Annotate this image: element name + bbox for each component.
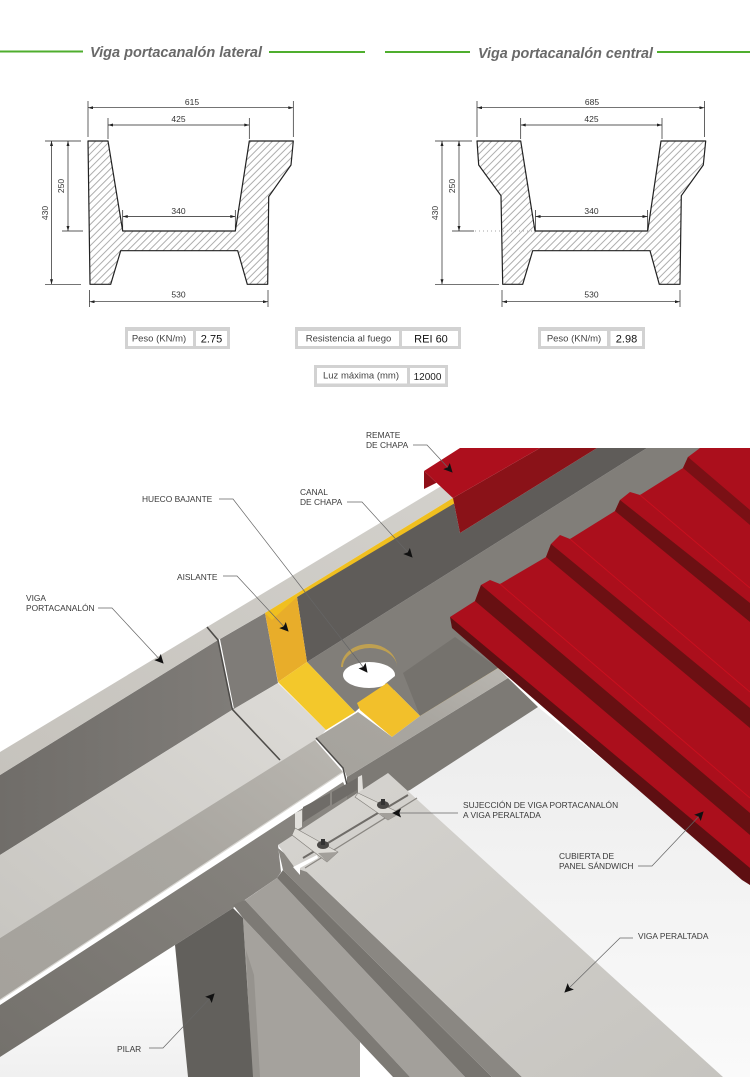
- data table: peso central: [538, 327, 645, 349]
- data table: resistencia al fuego: Resistencia al fuego: [306, 334, 391, 344]
- canal de chapa: floor and wall: [297, 448, 750, 716]
- label: cubierta: PANEL SÁNDWICH: [559, 861, 633, 871]
- label: sujecion: [393, 800, 618, 820]
- section drawing: lateral beam: 250: [56, 179, 66, 193]
- section drawing: central beam: 685: [585, 97, 599, 107]
- label: remate de chapa: REMATE: [366, 430, 401, 440]
- connection blocks under curb: [295, 775, 363, 831]
- label: sujecion: A VIGA PERALTADA: [463, 810, 541, 820]
- label: remate de chapa: [366, 430, 452, 472]
- label: viga portacanalon: [26, 593, 163, 663]
- label: canal de chapa: [300, 487, 412, 557]
- label: viga portacanalon: PORTACANALÓN: [26, 603, 95, 613]
- highlight lines: [500, 495, 750, 798]
- data table: resistencia al fuego: [295, 327, 461, 349]
- section drawing: lateral beam: [40, 97, 293, 307]
- slab joint: [232, 709, 280, 760]
- aislante: yellow insulation: [265, 498, 455, 730]
- floor slab: [0, 683, 326, 938]
- label: cubierta: CUBIERTA DE: [559, 851, 614, 861]
- heading: Viga portacanalón central: Viga portacanalón central: [478, 45, 654, 62]
- label: canal de chapa: CANAL: [300, 487, 328, 497]
- label: pilar: PILAR: [117, 1044, 141, 1054]
- section drawing: lateral beam: 340: [171, 206, 186, 216]
- rib 3: [615, 500, 750, 622]
- rib 1: [475, 585, 750, 835]
- data table: peso lateral: [125, 327, 230, 349]
- label: hueco bajante: HUECO BAJANTE: [142, 494, 213, 504]
- section drawing: central beam: 425: [584, 114, 599, 124]
- label: aislante: AISLANTE: [177, 572, 218, 582]
- section drawing: central beam: [430, 97, 706, 307]
- section drawing: central beam: 530: [584, 290, 599, 300]
- front curb: left segment: [0, 740, 343, 1000]
- label: remate de chapa: DE CHAPA: [366, 440, 409, 450]
- section drawing: lateral beam: 615: [185, 97, 199, 107]
- label: viga portacanalon: VIGA: [26, 593, 46, 603]
- section drawing: lateral beam: 425: [171, 114, 186, 124]
- section drawing: lateral beam: 530: [171, 290, 186, 300]
- label: hueco bajante: [142, 494, 367, 672]
- section drawing: central beam: 250: [447, 179, 457, 193]
- data table: luz maxima: Luz máxima (mm): [323, 370, 399, 382]
- hueco bajante: hole: [341, 644, 400, 690]
- viga peraltada: top face: [278, 773, 723, 1077]
- aislante: second yellow strip: [357, 668, 500, 737]
- background under structure: [0, 707, 750, 1077]
- front curb: lower dark face: [0, 782, 347, 1057]
- data table: peso central: 2.98: [616, 334, 637, 346]
- pilar: [175, 908, 360, 1077]
- cubierta de panel sandwich: [450, 448, 750, 885]
- data table: peso central: Peso (KN/m): [547, 334, 601, 344]
- viga portacanalon: outer wall: [0, 613, 278, 855]
- data table: resistencia al fuego: REI 60: [414, 334, 448, 346]
- label: sujecion: SUJECCIÓN DE VIGA PORTACANALÓN: [463, 800, 618, 810]
- section drawing: lateral beam: 430: [40, 206, 50, 220]
- section drawing: central beam: 430: [430, 206, 440, 220]
- label: pilar: [117, 994, 214, 1054]
- rib 2: [546, 544, 750, 728]
- remate de chapa: [424, 448, 597, 533]
- sujecion: rails and clips: [292, 793, 417, 875]
- data table: luz maxima: 12000: [414, 372, 442, 383]
- label: cubierta: [559, 812, 703, 871]
- heading: Viga portacanalón lateral: Viga portacanalón lateral: [90, 44, 263, 61]
- front curb: right segment: [316, 668, 538, 815]
- viga portacanalon: top face: [0, 485, 453, 775]
- label: viga peraltada: [565, 931, 709, 992]
- label: aislante: [177, 572, 288, 631]
- illustration: construction detail: [0, 448, 750, 1077]
- section drawing: central beam: 340: [584, 206, 599, 216]
- label: viga peraltada: VIGA PERALTADA: [638, 931, 709, 941]
- data table: peso lateral: Peso (KN/m): [132, 334, 186, 344]
- rib 4: [683, 457, 750, 525]
- label: canal de chapa: DE CHAPA: [300, 497, 343, 507]
- data table: peso lateral: 2.75: [201, 334, 222, 346]
- viga peraltada: side strip: [233, 848, 522, 1077]
- data table: luz maxima: [314, 365, 448, 387]
